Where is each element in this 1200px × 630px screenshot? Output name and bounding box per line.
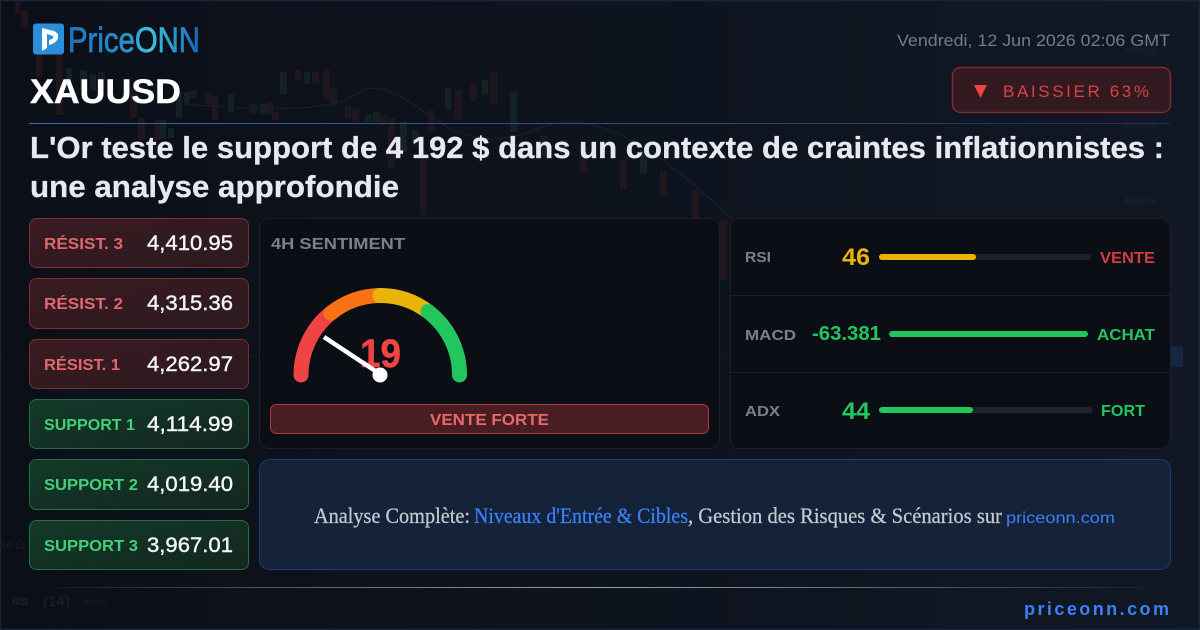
rsi caption: RSI bbox=[12, 597, 29, 608]
header divider bbox=[29, 123, 1170, 124]
panel: levels bbox=[30, 218, 248, 570]
gauge needle bbox=[324, 337, 388, 382]
call to action text: priceonn.com bbox=[1006, 510, 1115, 527]
level: resistance 3: 4,410.95 bbox=[147, 232, 233, 255]
level: support 1: SUPPORT 1 bbox=[44, 417, 135, 434]
price axis labels: 4500.00 bbox=[1124, 120, 1157, 130]
gauge value: 19 bbox=[360, 332, 401, 376]
level: support 2 bbox=[30, 460, 248, 510]
row: MACD: MACD bbox=[745, 327, 796, 344]
level: support 1: 4,114.99 bbox=[147, 413, 233, 436]
level: resistance 1: 4,262.97 bbox=[147, 353, 233, 376]
row: ADX: FORT bbox=[1101, 403, 1145, 420]
level: resistance 2: 4,315.36 bbox=[147, 292, 233, 315]
row: RSI: VENTE bbox=[1100, 250, 1155, 267]
row: MACD: ACHAT bbox=[1097, 327, 1155, 344]
panel: indicators bbox=[730, 218, 1170, 448]
logo bbox=[33, 21, 200, 60]
badge: bearish: BAISSIER 63% bbox=[1003, 82, 1149, 101]
row: MACD bbox=[745, 323, 1155, 345]
level: support 3: 3,967.01 bbox=[147, 534, 233, 557]
sentiment heading: 4H SENTIMENT bbox=[271, 236, 405, 253]
level: support 1 bbox=[30, 400, 248, 448]
level: resistance 1: RÉSIST. 1 bbox=[44, 355, 120, 374]
panel: sentiment bbox=[260, 218, 720, 448]
gauge bbox=[301, 295, 460, 382]
level: support 3: SUPPORT 3 bbox=[44, 538, 138, 555]
call to action text: Niveaux d'Entrée & Cibles bbox=[474, 503, 688, 528]
rsi caption: 00 14 bbox=[2, 541, 25, 551]
price tag bbox=[1171, 346, 1183, 367]
symbol: XAUUSD bbox=[30, 73, 181, 111]
price axis labels: 4600.00 bbox=[1124, 46, 1157, 56]
price axis labels bbox=[1124, 46, 1157, 206]
headline bbox=[30, 130, 1164, 204]
headline: L'Or teste le support de 4 192 $ dans un contexte de craintes inflationnistes : bbox=[30, 130, 1164, 165]
level: resistance 3 bbox=[30, 218, 248, 268]
level: support 2: 4,019.40 bbox=[147, 473, 233, 496]
footer divider bbox=[30, 587, 1170, 588]
row: MACD: -63.381 bbox=[812, 323, 881, 345]
level: resistance 2: RÉSIST. 2 bbox=[44, 294, 123, 313]
price axis labels: 4400.00 bbox=[1124, 196, 1157, 206]
wordmark: PriceONN bbox=[68, 21, 200, 60]
sentiment verdict bbox=[270, 404, 708, 434]
level: resistance 2 bbox=[30, 278, 248, 328]
level: support 2: SUPPORT 2 bbox=[44, 477, 138, 494]
level: support 3 bbox=[30, 520, 248, 570]
icon: down triangle bbox=[974, 85, 987, 98]
rsi caption: (14) bbox=[43, 593, 70, 610]
level: resistance 1 bbox=[30, 340, 248, 388]
rsi caption: 40 40 bbox=[84, 597, 107, 607]
row: ADX: ADX bbox=[745, 403, 780, 420]
row: ADX: 44 bbox=[842, 398, 871, 425]
row: RSI bbox=[745, 244, 1155, 271]
sentiment verdict: VENTE FORTE bbox=[430, 412, 549, 429]
level: resistance 3: RÉSIST. 3 bbox=[44, 234, 123, 253]
footer url: priceonn.com bbox=[1024, 599, 1169, 619]
call to action text bbox=[314, 503, 1115, 528]
date: Vendredi, 12 Jun 2026 02:06 GMT bbox=[897, 31, 1170, 50]
headline: une analyse approfondie bbox=[30, 169, 399, 204]
call to action text: , Gestion des Risques & Scénarios sur bbox=[688, 503, 1003, 528]
call to action text: Analyse Complète: bbox=[314, 503, 470, 528]
row: RSI: RSI bbox=[745, 249, 771, 266]
badge: bearish bbox=[952, 68, 1170, 112]
panel: call to action bbox=[260, 460, 1170, 570]
row: RSI: 46 bbox=[842, 244, 870, 271]
icon: logo mark bbox=[33, 24, 64, 54]
rsi caption bbox=[2, 541, 107, 610]
row: ADX bbox=[745, 398, 1145, 425]
